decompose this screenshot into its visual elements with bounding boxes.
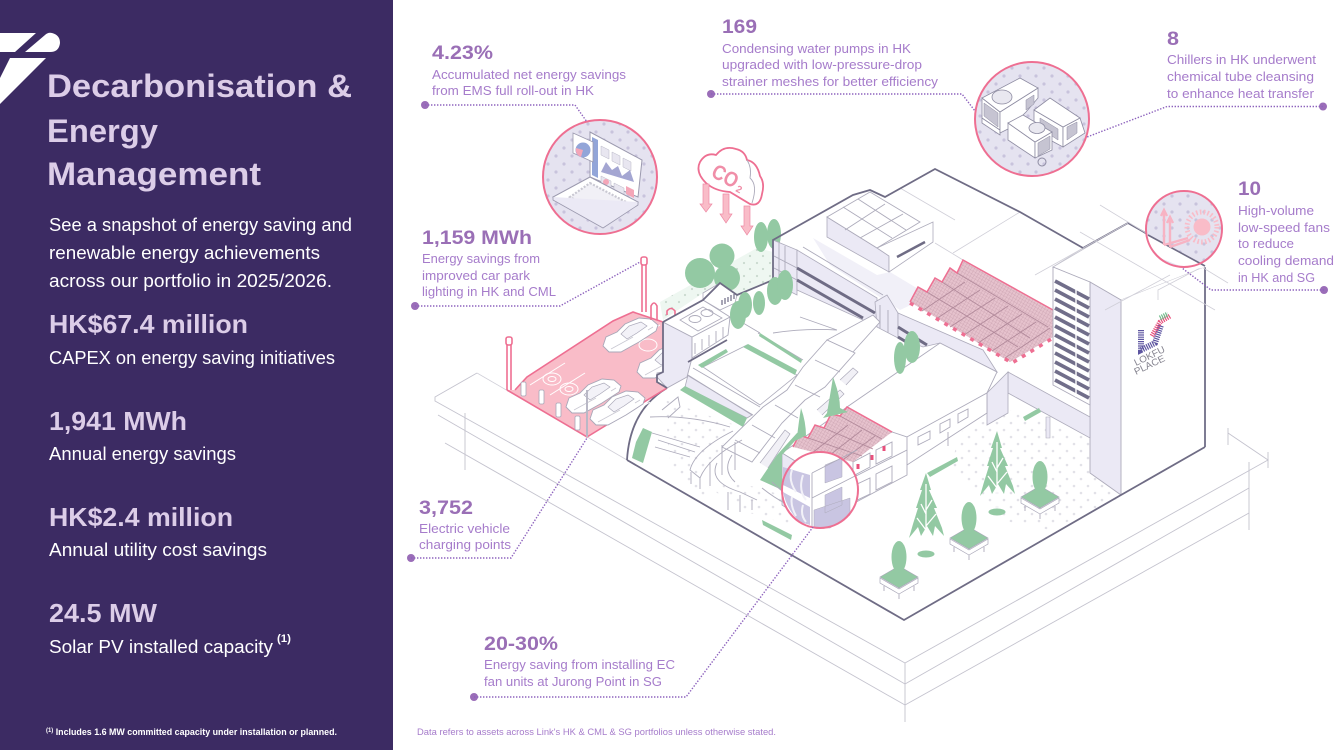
stat: capex: CAPEX on energy saving initiatives <box>49 348 335 368</box>
stat: capex: HK$67.4 million <box>49 309 248 339</box>
callout: 1,159 MWh: Energy savings from <box>422 251 540 266</box>
illustration: lokfu place logo: PLACE <box>1132 353 1167 378</box>
illustration: lokfu place logo <box>1132 314 1170 378</box>
illustration: site base <box>627 169 1205 620</box>
icon: brand logo mark <box>0 33 60 104</box>
callout: 169: Condensing water pumps in HK <box>722 41 911 56</box>
illustration: dark building outline <box>627 169 1205 620</box>
callout: 3,752 <box>407 438 587 562</box>
callout: 1,159 MWh: 1,159 MWh <box>422 228 532 249</box>
callout: 8 chillers: 8 <box>1167 29 1179 50</box>
title: Management <box>47 156 261 192</box>
callout: 4.23%: from EMS full roll-out in HK <box>432 83 594 98</box>
callout: 10 fans: in HK and SG <box>1238 270 1315 285</box>
icon: CO2 cloud and arrows: CO <box>708 160 742 193</box>
callout: 1,159 MWh: improved car park <box>422 268 531 283</box>
title: Energy <box>47 113 158 149</box>
stat: solar capacity: (1) <box>277 633 291 645</box>
callout: 8 chillers: Chillers in HK underwent <box>1167 52 1316 67</box>
callout: 10 fans <box>1182 179 1334 294</box>
illustration: plaza dots and bridge <box>950 372 1121 530</box>
icon: fans and sun circle <box>1146 191 1222 270</box>
callout: 10 fans: cooling demand <box>1238 253 1334 268</box>
illustration: lokfu place logo: LOKFU <box>1132 344 1167 369</box>
callout: 4.23% <box>421 43 627 122</box>
callout: 169 <box>707 17 975 111</box>
illustration: left front block with rooftop <box>657 283 737 388</box>
data source note: Data refers to assets across Link's HK & CML & SG portfolios unless otherwise stated. <box>417 727 776 738</box>
panel: left sidebar <box>0 0 393 750</box>
icon: charging lamps <box>506 257 675 390</box>
icon: plaza conifers <box>909 431 1015 558</box>
intro text: renewable energy achievements <box>49 242 320 263</box>
title <box>47 68 352 192</box>
icon: row of trees and bushes <box>730 270 920 374</box>
stat: solar capacity: 24.5 MW <box>49 598 157 628</box>
callout: 10 fans: 10 <box>1238 179 1261 200</box>
callout: 3,752: charging points <box>419 537 512 552</box>
illustration: low-rise retail block <box>782 343 1008 525</box>
callout: 10 fans: High-volume <box>1238 203 1314 218</box>
illustration: plinth lines <box>435 373 1268 722</box>
stat: energy savings: 1,941 MWh <box>49 406 187 436</box>
illustration: car park <box>507 312 692 437</box>
footnote: (1) <box>46 728 53 734</box>
title: Decarbonisation & <box>47 68 352 104</box>
illustration: tower <box>1035 205 1228 495</box>
footnote: Includes 1.6 MW committed capacity under installation or planned. <box>53 727 337 737</box>
callout: 8 chillers: to enhance heat transfer <box>1167 86 1315 101</box>
icon: trees behind the car park <box>685 219 781 291</box>
icon: chillers circle <box>975 62 1089 176</box>
stat: capex <box>49 309 335 368</box>
illustration: central atrium and staircase <box>680 315 880 490</box>
callout: 1,159 MWh: lighting in HK and CML <box>422 284 556 299</box>
stat: utility savings: Annual utility cost savings <box>49 540 267 560</box>
callout: 10 fans: low-speed fans <box>1238 220 1331 235</box>
callout: 4.23%: Accumulated net energy savings <box>432 67 627 82</box>
callout: 20-30%: Energy saving from installing EC <box>484 657 675 672</box>
callout: 3,752: 3,752 <box>419 498 473 519</box>
callout: 10 fans: to reduce <box>1238 236 1294 251</box>
stat: solar capacity: Solar PV installed capacity <box>49 637 273 657</box>
icon: CO2 cloud and arrows <box>698 148 763 235</box>
callout: 8 chillers: chemical tube cleansing <box>1167 69 1314 84</box>
illustration: roof skylight box <box>827 192 933 272</box>
stat: energy savings <box>49 406 236 464</box>
callout: 1,159 MWh <box>411 228 640 310</box>
stat: solar capacity <box>49 598 291 657</box>
callout: 20-30% <box>470 527 813 701</box>
callout: 169: upgraded with low-pressure-drop <box>722 57 922 72</box>
illustration: rear building walls <box>773 188 1083 372</box>
callout: 169: strainer meshes for better efficiency <box>722 74 939 89</box>
stat: energy savings: Annual energy savings <box>49 444 236 464</box>
icon: EC fan circle <box>782 450 858 528</box>
intro text: See a snapshot of energy saving and <box>49 214 352 235</box>
intro text <box>49 214 352 291</box>
callout: 20-30%: fan units at Jurong Point in SG <box>484 674 662 689</box>
callout: 20-30%: 20-30% <box>484 634 558 655</box>
callout: 3,752: Electric vehicle <box>419 521 510 536</box>
icon: CO2 cloud and arrows: 2 <box>734 184 744 196</box>
intro text: across our portfolio in 2025/2026. <box>49 270 332 291</box>
illustration: lower left curved block <box>627 388 812 540</box>
icon: laptop circle <box>543 120 657 234</box>
callout: 4.23%: 4.23% <box>432 43 493 64</box>
illustration: large solar array <box>910 260 1053 363</box>
icon: bench <box>927 457 958 477</box>
icon: plaza planters <box>880 461 1059 599</box>
stat: utility savings: HK$2.4 million <box>49 502 233 532</box>
callout: 8 chillers <box>1087 29 1327 137</box>
stat: utility savings <box>49 502 267 560</box>
illustration: green dotted belt <box>660 248 773 320</box>
illustration: small solar array <box>793 407 892 469</box>
callout: 169: 169 <box>722 17 757 38</box>
